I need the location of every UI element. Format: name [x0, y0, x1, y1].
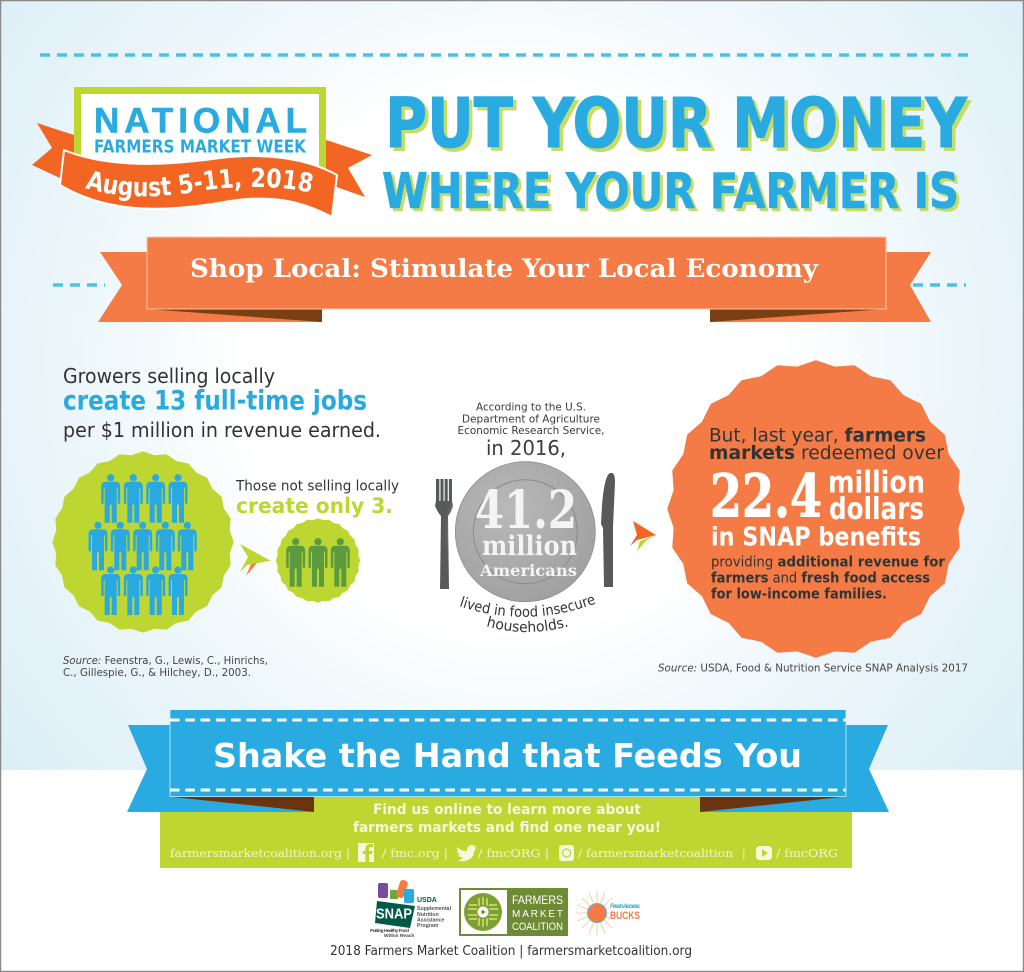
- key figure: [710, 462, 925, 553]
- icon: plate with 41.2 million Americans: [452, 459, 598, 605]
- logo: SNAP: Supplemental: [417, 906, 452, 912]
- social links: farmersmarketcoalition.org |: [170, 847, 350, 861]
- key figure: million: [828, 466, 925, 501]
- invitation text: Find us online to learn more about: [373, 802, 641, 818]
- logo: SNAP: Putting Healthy Food: [370, 928, 409, 934]
- graphic: 13 jobs people: [53, 452, 233, 632]
- logo: Farmers Market Coalition: COALITION: [512, 921, 563, 933]
- plate text: Americans: [479, 561, 577, 580]
- plate text: [475, 480, 577, 580]
- logo: Fresh Access Bucks: Fresh Access: [610, 904, 641, 910]
- invitation text: farmers markets and find one near you!: [353, 820, 661, 836]
- source: left: [63, 655, 268, 679]
- logo: SNAP: SNAP: [376, 906, 412, 922]
- text: those not selling locally: create only 3.: [236, 494, 393, 518]
- footer text: 2018 Farmers Market Coalition | farmersmarketcoalition.org: [330, 944, 692, 959]
- logo: Farmers Market Coalition: FARMERS: [512, 893, 563, 907]
- banner text: Shake the Hand that Feeds You: [213, 736, 802, 775]
- badge: National Farmers Market Week: [32, 87, 372, 216]
- social links: [170, 843, 838, 862]
- source: left: C., Gillespie, G., & Hilchey, D., 2003.: [63, 667, 251, 679]
- panel: SNAP benefits: [668, 361, 964, 657]
- text: growers selling locally: per $1 million in revenue earned.: [63, 418, 381, 442]
- text: those not selling locally: [235, 478, 399, 518]
- plate text: million: [482, 531, 577, 562]
- badge: National Farmers Market Week: FARMERS MARKET WEEK: [94, 136, 307, 158]
- arrow: to small group: [240, 544, 271, 576]
- detail text: for low-income families.: [711, 587, 887, 603]
- arrow: to SNAP: [630, 521, 656, 551]
- intro text: But, last year, farmers: [709, 425, 926, 447]
- icon: knife: [601, 473, 615, 587]
- text: lived in food insecure households: [460, 596, 596, 632]
- logo: SNAP: Assistance: [417, 918, 445, 924]
- intro text: markets redeemed over: [709, 442, 944, 464]
- plate text: 41.2: [475, 480, 577, 541]
- text: growers selling locally: Growers selling locally: [63, 364, 275, 388]
- title: [382, 84, 971, 223]
- panel: find us online: [160, 797, 852, 868]
- date: August 5-11, 2018: [85, 168, 313, 201]
- banner: shake the hand: [127, 710, 889, 812]
- key figure: 22.4: [710, 462, 822, 531]
- logo: Farmers Market Coalition: [459, 888, 568, 936]
- logo: Farmers Market Coalition: MARKET: [512, 909, 563, 920]
- text: lived in food insecure households: lived in food insecure: [460, 596, 596, 617]
- banner text: Shop Local: Stimulate Your Local Economy: [190, 254, 820, 283]
- invitation text: [353, 802, 661, 836]
- logo: SNAP: Within Reach: [384, 933, 414, 939]
- ribbon tails: [32, 123, 372, 197]
- source: right: Source: USDA, Food & Nutrition Service SNAP Analysis 2017: [658, 663, 968, 675]
- text: lived in food insecure households: households.: [487, 616, 568, 632]
- logo: Fresh Access Bucks: [576, 890, 642, 936]
- text: according to USDA: Economic Research Service,: [458, 424, 604, 437]
- text: those not selling locally: Those not selling locally: [235, 478, 399, 494]
- logo: SNAP: [370, 879, 452, 939]
- graphic: 3 jobs people: [276, 519, 360, 602]
- text: according to USDA: in 2016,: [486, 436, 566, 460]
- icon: fork: [435, 479, 453, 589]
- logo: SNAP: Nutrition: [417, 912, 439, 918]
- source: left: Source: Feenstra, G., Lewis, C., Hinrichs,: [63, 655, 268, 667]
- logo: Fresh Access Bucks: BUCKS: [610, 910, 640, 922]
- text: according to USDA: [458, 401, 604, 460]
- text: growers selling locally: create 13 full-time jobs: [63, 386, 367, 416]
- key figure: in SNAP benefits: [711, 523, 921, 553]
- key figure: dollars: [829, 492, 924, 527]
- social links: / fmc.org |: [382, 847, 448, 861]
- social links: / fmcORG: [776, 847, 838, 860]
- intro text: [709, 425, 944, 464]
- text: growers selling locally: [63, 364, 381, 442]
- social links: / farmersmarketcoalition: [578, 847, 733, 860]
- text: according to USDA: According to the U.S.: [476, 401, 586, 414]
- text: according to USDA: Department of Agriculture: [462, 413, 600, 426]
- detail text: providing additional revenue for: [711, 555, 945, 571]
- badge heading: NATIONAL: [94, 102, 307, 140]
- social links: |: [742, 847, 746, 861]
- logo: SNAP: Program: [417, 923, 439, 929]
- date ribbon: [60, 150, 337, 217]
- detail text: [711, 555, 945, 603]
- banner: shop local: [98, 237, 931, 322]
- social links: / fmcORG |: [478, 847, 549, 861]
- logo: SNAP: USDA: [417, 897, 437, 904]
- detail text: farmers and fresh food access: [711, 571, 930, 587]
